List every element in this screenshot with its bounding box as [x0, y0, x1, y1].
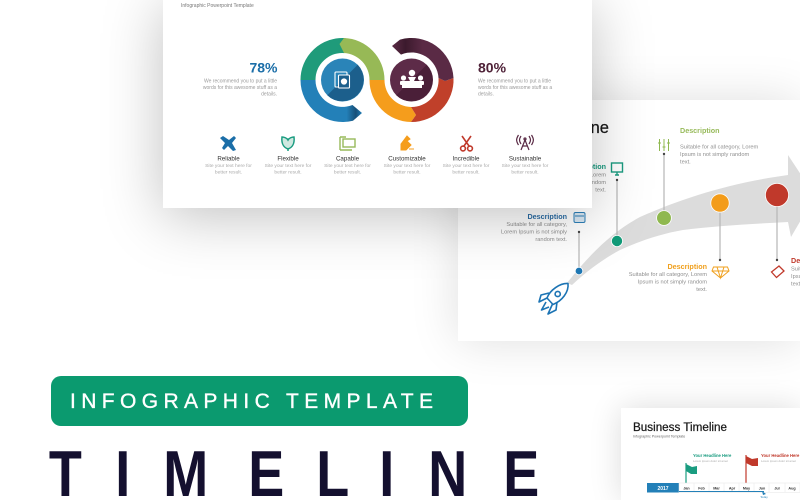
feature: Capable: Capable — [336, 156, 360, 162]
flag: teal — [686, 453, 732, 483]
flag: red: Your Headline Here — [761, 453, 800, 458]
badge: infographic template — [51, 376, 468, 426]
timeline nodes — [575, 183, 789, 275]
icon: plane — [220, 136, 236, 151]
icon: scissors — [461, 136, 472, 151]
feature: Sustainable — [502, 135, 549, 176]
heading: Business Timeline: Business Timeline — [633, 422, 727, 434]
feature: Sustainable: better result. — [511, 170, 539, 176]
today marker — [679, 491, 768, 499]
text block: 78 percent: We recommend you to put a little — [204, 78, 277, 84]
feature: Flexible: better result. — [274, 170, 302, 176]
text block: 80 percent — [478, 60, 552, 98]
feature: Incredible: Site your text here for — [443, 163, 490, 169]
text block: teal description: Description — [566, 162, 606, 171]
month scale — [679, 483, 800, 492]
text block: orange description: Ipsum is not simply random — [638, 280, 707, 286]
text block: teal description: Ipsum is not simply random — [537, 180, 606, 186]
text block: 78 percent: details. — [261, 92, 277, 98]
badge: infographic template: INFOGRAPHIC TEMPLATE — [70, 390, 433, 413]
month scale: Aug — [788, 486, 796, 490]
text block: 78 percent: words for this awesome stuff as a — [203, 85, 277, 91]
text block: red description — [791, 256, 800, 288]
panel: business timeline slide — [621, 408, 800, 500]
feature: Capable: Site your text here for — [324, 163, 371, 169]
feature: Customizable: Site your text here for — [384, 163, 431, 169]
flag: red — [746, 453, 800, 483]
month scale: Jan — [683, 486, 690, 490]
text block: blue description — [501, 212, 567, 243]
month scale: Feb — [698, 486, 706, 490]
feature: Reliable: Reliable — [217, 156, 240, 162]
feature: Reliable — [205, 136, 252, 176]
feature: Incredible: better result. — [452, 170, 480, 176]
year label: 2017 — [657, 486, 669, 492]
text block: orange description: Suitable for all category, Lorem — [629, 272, 707, 278]
feature: Sustainable: Site your text here for — [502, 163, 549, 169]
text block: green description: Suitable for all category, Lorem — [680, 144, 759, 150]
text block: 80 percent: words for this awesome stuff as a — [478, 85, 552, 91]
text block: teal description — [528, 162, 606, 194]
icon: signal tower — [517, 135, 533, 150]
text block: orange description: Description — [667, 262, 707, 271]
month scale: May — [743, 486, 751, 490]
text block: blue description: Suitable for all category, — [506, 222, 567, 228]
feature: Flexible — [265, 137, 312, 176]
flag: teal: Lorem ipsum dolor sit amet — [693, 459, 728, 463]
icon: red ticket — [772, 266, 784, 278]
year label — [647, 483, 679, 492]
month scale: Apr — [729, 486, 736, 490]
flag: red: Lorem ipsum dolor sit amet — [761, 459, 796, 463]
feature: Customizable: Customizable — [388, 156, 426, 162]
text block: blue description: Description — [527, 212, 567, 221]
text block: 80 percent: We recommend you to put a little — [478, 78, 551, 84]
text block: green description — [680, 126, 759, 166]
panel: arrow timeline slide — [458, 100, 800, 341]
feature: Flexible: Site your text here for — [265, 163, 312, 169]
flag: teal: Your Headline Here — [693, 453, 732, 458]
text block: green description: Description — [680, 126, 720, 135]
icon: leaf — [282, 137, 294, 151]
feature: Incredible: Incredible — [453, 156, 480, 162]
icon: green sliders — [658, 139, 670, 151]
feature: Incredible — [443, 136, 490, 176]
subtitle: Infographic Powerpoint Template — [181, 3, 254, 9]
chart: curved grey arrow — [567, 155, 800, 285]
text block: orange description: text. — [696, 287, 707, 293]
text block: blue description: random text. — [535, 237, 567, 243]
icon: house tool — [401, 136, 414, 150]
text block: green description: Ipsum is not simply random — [680, 152, 749, 158]
purple inner circle — [390, 58, 433, 102]
chart: infinity loop — [300, 38, 454, 122]
text block: blue description: Lorem Ipsum is not simply — [501, 230, 567, 236]
today marker: Today — [760, 495, 768, 499]
text block: 78 percent: 78% — [249, 60, 278, 76]
feature: Sustainable: Sustainable — [509, 156, 542, 162]
month scale: Jun — [759, 486, 766, 490]
blue inner circle — [321, 58, 364, 102]
feature: Flexible: Flexible — [277, 156, 299, 162]
text block: 80 percent: 80% — [478, 60, 507, 76]
icon: rocket — [539, 283, 568, 314]
feature: Capable: better result. — [334, 170, 361, 176]
feature: Reliable: Site your text here for — [205, 163, 252, 169]
month scale: Jul — [774, 486, 780, 490]
icon: orange diamond — [712, 267, 729, 278]
icon: teal monitor — [612, 163, 622, 175]
connector lines — [578, 153, 778, 268]
heading: timeline slide title: Timeline — [547, 119, 609, 137]
text block: teal description: Suitable for all category, Lorem — [528, 172, 606, 178]
feature: Customizable: better result. — [393, 170, 421, 176]
text block: orange description — [629, 262, 707, 293]
feature: Reliable: better result. — [215, 170, 242, 176]
icon: display — [340, 137, 355, 150]
text block: 78 percent — [203, 60, 278, 98]
text block: 80 percent: details. — [478, 92, 494, 98]
feature: Customizable — [384, 136, 431, 176]
subtitle: Infographic Powerpoint Template — [633, 434, 685, 438]
text block: teal description: text. — [595, 188, 606, 194]
icon: blue card — [574, 212, 585, 222]
month scale: Mar — [713, 486, 720, 490]
panel: infinity slide — [163, 0, 592, 208]
text block: green description: text. — [680, 160, 691, 166]
feature: Capable — [324, 137, 371, 176]
